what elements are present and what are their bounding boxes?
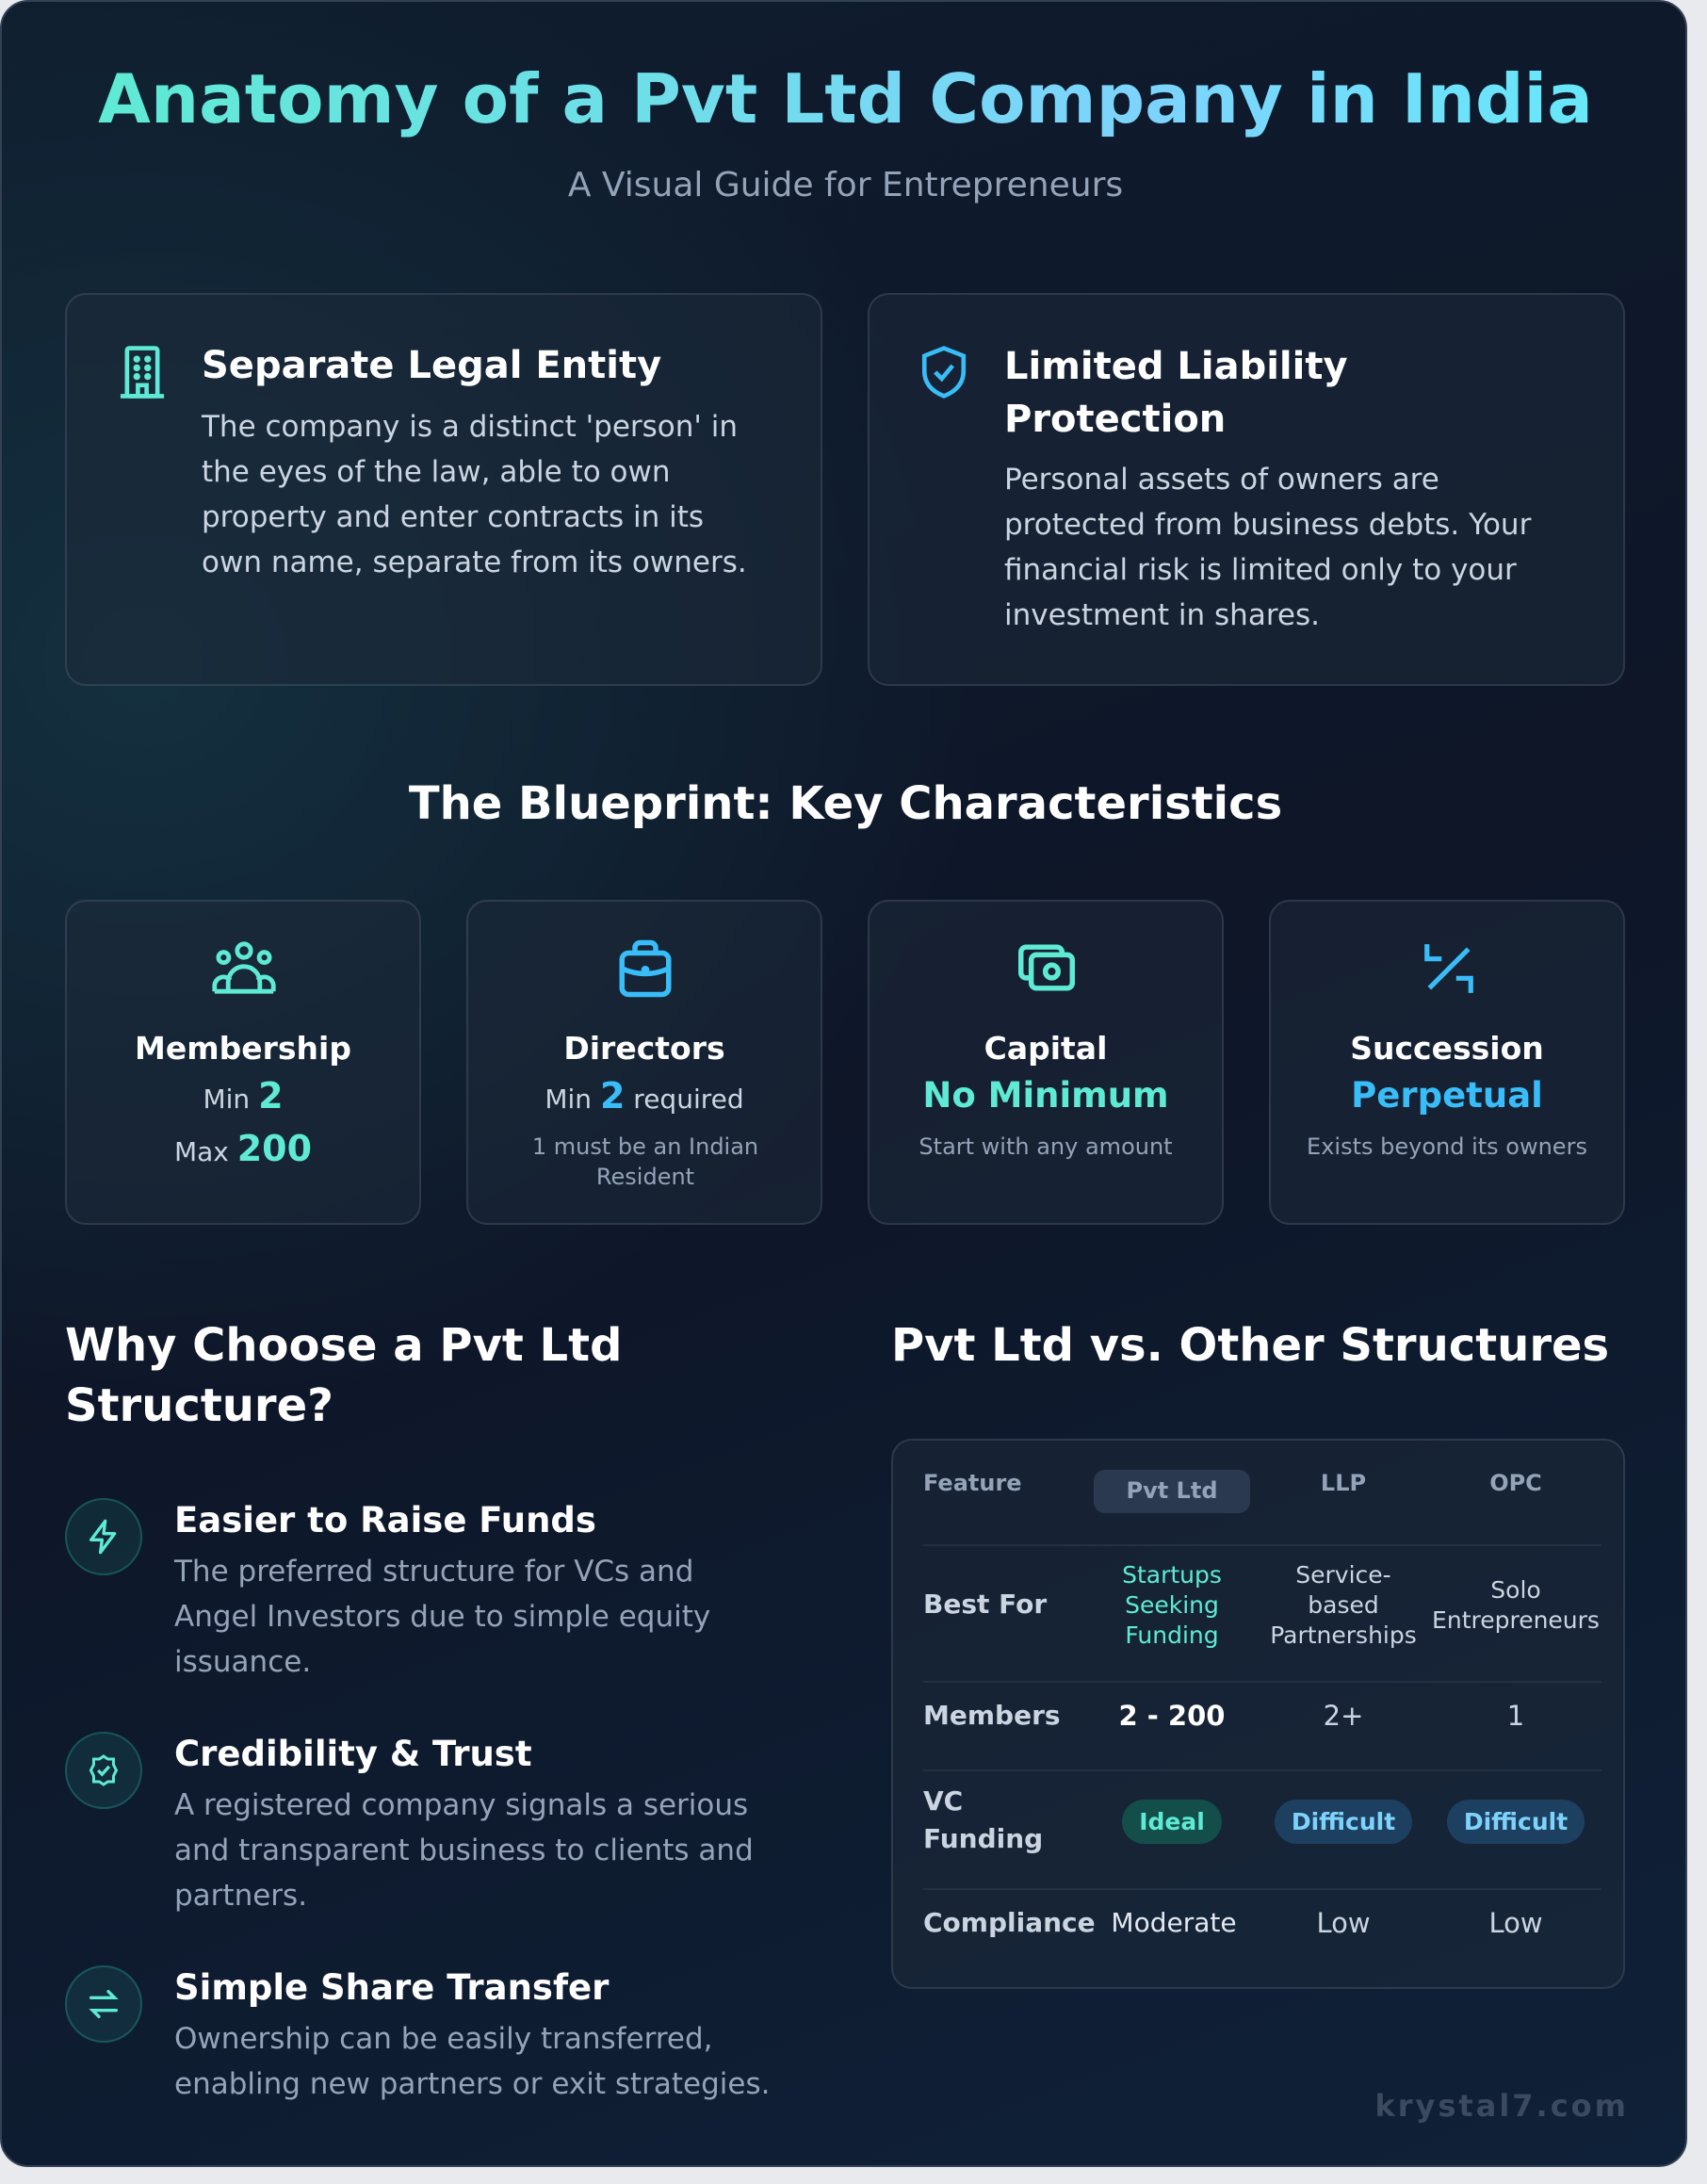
row: members: Members xyxy=(923,1700,1061,1731)
icon: briefcase xyxy=(620,940,671,997)
text: A registered company signals a serious and transparent business to clients and partners. xyxy=(174,1788,754,1913)
comparison table: 1 xyxy=(1507,1700,1524,1732)
icon: cash xyxy=(1018,944,1075,991)
value: No Minimum xyxy=(922,1075,1169,1116)
subtitle: A Visual Guide for Entrepreneurs xyxy=(568,166,1123,204)
panel: capital xyxy=(868,900,1224,1225)
comparison table: Low xyxy=(1316,1907,1371,1939)
heading: why choose: Structure? xyxy=(65,1379,333,1432)
title: Anatomy of a Pvt Ltd Company in India xyxy=(98,59,1593,139)
row: vc funding: VC xyxy=(923,1785,963,1817)
comparison table: Pvt Ltd xyxy=(1126,1477,1217,1504)
panel: directors xyxy=(466,900,822,1225)
panel: succession xyxy=(1269,900,1625,1225)
value: Min 2 required xyxy=(545,1075,744,1116)
icon: people xyxy=(212,941,276,994)
comparison table: 2+ xyxy=(1324,1700,1363,1732)
panel: separate legal entity xyxy=(65,293,822,686)
comparison table: Startups Seeking Funding xyxy=(1122,1561,1222,1649)
title: Directors xyxy=(563,1030,725,1067)
title: Membership xyxy=(135,1030,351,1067)
icon: lightning xyxy=(65,1498,142,1575)
comparison table: OPC xyxy=(1489,1470,1542,1496)
title: Simple Share Transfer xyxy=(174,1967,609,2008)
heading: why choose: Why Choose a Pvt Ltd xyxy=(65,1319,622,1372)
note: Exists beyond its owners xyxy=(1307,1133,1587,1160)
comparison table: LLP xyxy=(1321,1470,1366,1496)
text: Personal assets of owners are protected from business debts. Your financial risk is limited only to your investment in shares. xyxy=(1004,463,1531,632)
panel: membership: Max 200 xyxy=(174,1128,312,1169)
comparison table: 2 - 200 xyxy=(1119,1700,1225,1732)
row: vc funding: Funding xyxy=(923,1823,1043,1854)
row: vc funding xyxy=(923,1785,1043,1854)
title: Easier to Raise Funds xyxy=(174,1500,596,1540)
heading: Protection xyxy=(1004,398,1226,441)
watermark: krystal7.com xyxy=(1374,2088,1629,2124)
value: Min 2 xyxy=(203,1075,284,1116)
title: Capital xyxy=(984,1030,1107,1067)
icon: shield xyxy=(921,346,967,399)
note: Start with any amount xyxy=(919,1133,1173,1160)
row: compliance: Compliance xyxy=(923,1907,1096,1938)
icon: arrows xyxy=(65,1965,142,2043)
icon: badge check xyxy=(65,1732,142,1809)
comparison table: Moderate xyxy=(1111,1907,1237,1938)
comparison table: Difficult xyxy=(1292,1808,1395,1835)
comparison table: Difficult xyxy=(1464,1808,1568,1835)
comparison table: Service-based Partnerships xyxy=(1270,1561,1417,1649)
comparison table: Ideal xyxy=(1139,1808,1205,1835)
heading: comparison: Pvt Ltd vs. Other Structures xyxy=(891,1319,1609,1372)
text: The company is a distinct 'person' in the eyes of the law, able to own property and enter contracts in its own name, separate from its owners. xyxy=(202,410,747,579)
panel: membership xyxy=(65,900,421,1225)
heading: Separate Legal Entity xyxy=(202,344,661,387)
comparison table: Low xyxy=(1488,1907,1543,1939)
title: Succession xyxy=(1350,1030,1544,1067)
text: The preferred structure for VCs and Angel Investors due to simple equity issuance. xyxy=(174,1555,710,1679)
value: Perpetual xyxy=(1351,1075,1543,1116)
heading: Limited Liability xyxy=(1004,345,1348,388)
icon: building xyxy=(121,346,164,399)
text: Ownership can be easily transferred, enabling new partners or exit strategies. xyxy=(174,2022,770,2101)
row: best for: Best For xyxy=(923,1589,1047,1620)
heading: why choose xyxy=(65,1319,622,1432)
title: Credibility & Trust xyxy=(174,1734,532,1774)
note: 1 must be an Indian Resident xyxy=(532,1133,758,1190)
comparison table: Solo Entrepreneurs xyxy=(1432,1576,1600,1634)
heading: blueprint: The Blueprint: Key Characteristics xyxy=(409,777,1282,830)
item: credibility xyxy=(65,1732,754,1913)
item: share transfer xyxy=(65,1965,770,2101)
header row: Feature xyxy=(923,1470,1022,1496)
heading xyxy=(1004,345,1348,441)
panel: limited liability xyxy=(868,293,1625,686)
item: raise funds xyxy=(65,1498,710,1679)
icon: percent xyxy=(1424,944,1473,993)
